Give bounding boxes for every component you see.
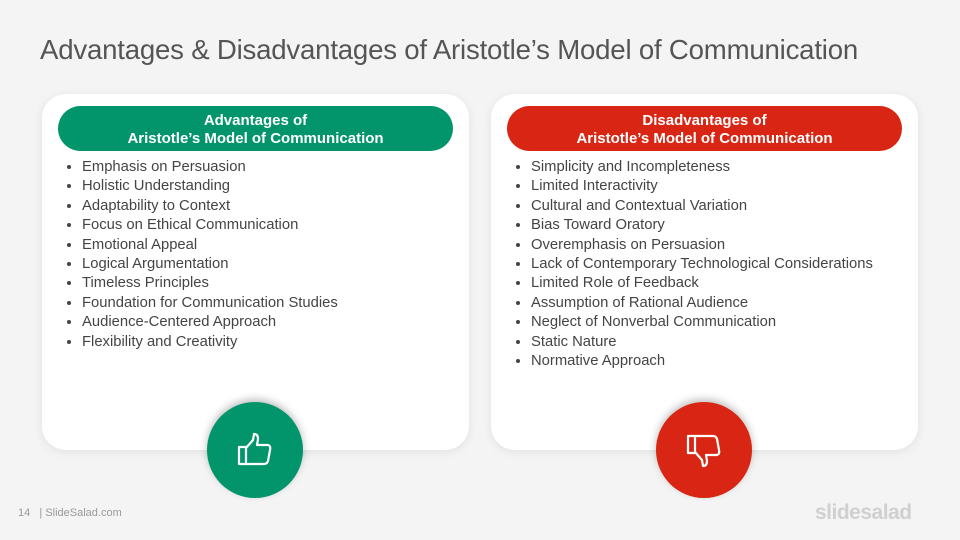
heading: advantages <box>58 106 453 151</box>
list: advantages: Audience-Centered Approach <box>82 314 276 330</box>
list: advantages: Focus on Ethical Communication <box>82 217 298 233</box>
panel: disadvantages <box>491 94 918 450</box>
list: advantages: Logical Argumentation <box>82 256 228 272</box>
list: disadvantages: Overemphasis on Persuasion <box>531 237 725 253</box>
heading: disadvantages: Aristotle’s Model of Communication <box>576 130 833 147</box>
list: advantages: Adaptability to Context <box>82 198 230 214</box>
heading: disadvantages <box>507 106 902 151</box>
list: disadvantages: Limited Interactivity <box>531 178 658 194</box>
list: advantages <box>67 159 338 350</box>
list: advantages: Flexibility and Creativity <box>82 334 237 350</box>
list: disadvantages: Simplicity and Incompleteness <box>531 159 730 175</box>
list: advantages: Foundation for Communication Studies <box>82 295 338 311</box>
logo: slidesalad <box>815 501 912 524</box>
heading: advantages: Aristotle’s Model of Communication <box>127 130 384 147</box>
list: advantages: Holistic Understanding <box>82 178 230 194</box>
title: Advantages & Disadvantages of Aristotle’s Model of Communication <box>40 34 858 65</box>
list: disadvantages: Normative Approach <box>531 353 665 369</box>
icon: thumbs up <box>207 402 303 498</box>
list: advantages: Timeless Principles <box>82 275 209 291</box>
list: disadvantages: Limited Role of Feedback <box>531 275 699 291</box>
heading: disadvantages: Disadvantages of <box>642 112 767 129</box>
list: disadvantages: Bias Toward Oratory <box>531 217 665 233</box>
list: advantages: Emphasis on Persuasion <box>82 159 246 175</box>
list: disadvantages: Cultural and Contextual Variation <box>531 198 747 214</box>
icon: thumbs down <box>656 402 752 498</box>
list: disadvantages: Neglect of Nonverbal Communication <box>531 314 776 330</box>
list: disadvantages: Assumption of Rational Audience <box>531 295 748 311</box>
list: disadvantages: Static Nature <box>531 334 617 350</box>
footer: page number: 14 | SlideSalad.com <box>18 507 122 519</box>
list: advantages: Emotional Appeal <box>82 237 197 253</box>
list: disadvantages: Lack of Contemporary Technological Considerations <box>531 256 873 272</box>
list: disadvantages <box>516 159 873 369</box>
heading: advantages: Advantages of <box>204 112 307 129</box>
panel: advantages <box>42 94 469 450</box>
